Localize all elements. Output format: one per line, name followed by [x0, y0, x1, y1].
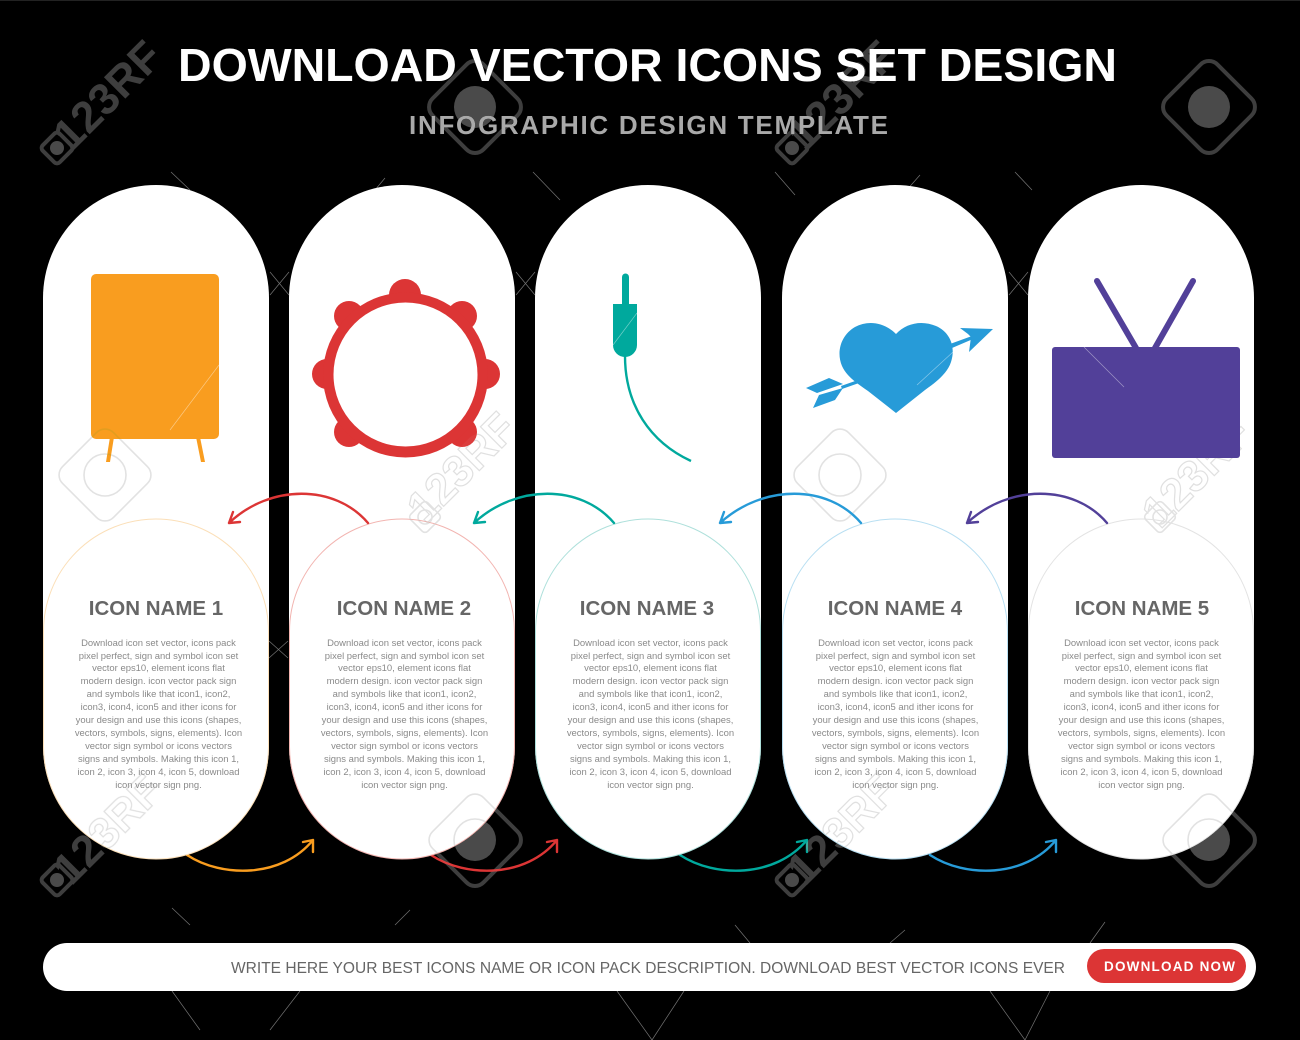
icon: red tambourine: [312, 279, 500, 458]
description 2: [321, 638, 488, 791]
description 2: Download icon set vector, icons pack: [327, 638, 482, 649]
subtitle: INFOGRAPHIC DESIGN TEMPLATE: [409, 110, 888, 140]
description 1: signs and symbols. Making this icon 1,: [78, 754, 239, 765]
text: 123RF: [778, 32, 906, 160]
description 2: your design and use this icons (shapes,: [322, 715, 487, 726]
text: 123RF: [1133, 409, 1261, 537]
description 5: modern design. icon vector pack sign: [1064, 676, 1219, 687]
footer bar: [43, 943, 1256, 991]
text: 123RF: [398, 404, 526, 532]
description 4: pixel perfect, sign and symbol icon set: [816, 651, 976, 662]
text oval 1: [44, 519, 268, 859]
description 1: icon 2, icon 3, icon 4, icon 5, download: [77, 767, 240, 778]
text oval 2: [290, 519, 514, 859]
description 1: Download icon set vector, icons pack: [81, 638, 236, 649]
description 5: [1058, 638, 1225, 791]
text: 123RF: [44, 766, 172, 894]
icon: orange easel board: [91, 274, 219, 462]
description 1: vector sign symbol or icons vectors: [85, 741, 232, 752]
description 2: icon3, icon4, icon5 and ither icons for: [327, 702, 482, 713]
description 1: and symbols like that icon1, icon2,: [87, 689, 230, 700]
description 5: and symbols like that icon1, icon2,: [1070, 689, 1213, 700]
description 1: vector eps10, element icons flat: [92, 663, 225, 674]
icon: purple tv with antenna: [1052, 281, 1240, 458]
description 5: Download icon set vector, icons pack: [1064, 638, 1219, 649]
description 4: Download icon set vector, icons pack: [818, 638, 973, 649]
description 5: icon vector sign png.: [1098, 780, 1185, 791]
description 4: your design and use this icons (shapes,: [813, 715, 978, 726]
description 3: vectors, symbols, signs, elements). Icon: [567, 728, 734, 739]
description 3: icon vector sign png.: [607, 780, 694, 791]
description 3: vector sign symbol or icons vectors: [577, 741, 724, 752]
icon: teal audio jack: [613, 274, 691, 461]
description 3: [567, 638, 734, 791]
description 4: vector sign symbol or icons vectors: [822, 741, 969, 752]
heading 2: ICON NAME 2: [337, 597, 471, 620]
description 1: [75, 638, 242, 791]
panel: icon name 1: [43, 185, 269, 859]
arrow: red connector panel 2 to 3: [431, 840, 557, 871]
description 2: modern design. icon vector pack sign: [327, 676, 482, 687]
description 3: pixel perfect, sign and symbol icon set: [571, 651, 731, 662]
arrow: red return panel 2 to 1: [229, 494, 368, 523]
heading 1: ICON NAME 1: [89, 597, 223, 620]
download button: DOWNLOAD NOW: [1104, 959, 1235, 974]
heading 3: ICON NAME 3: [580, 597, 714, 620]
arrow: blue connector panel 4 to 5: [930, 840, 1056, 871]
description 2: icon 2, icon 3, icon 4, icon 5, download: [323, 767, 486, 778]
text oval 5: [1028, 519, 1254, 859]
heading 4: ICON NAME 4: [828, 597, 963, 620]
description 2: and symbols like that icon1, icon2,: [333, 689, 476, 700]
arrow: teal connector panel 3 to 4: [680, 840, 807, 871]
description 4: and symbols like that icon1, icon2,: [824, 689, 967, 700]
description 1: vectors, symbols, signs, elements). Icon: [75, 728, 242, 739]
description 1: icon vector sign png.: [115, 780, 202, 791]
panel: icon name 3: [535, 185, 761, 859]
text: 123RF: [778, 766, 906, 894]
text: 123RF: [44, 32, 172, 160]
text: 123RF: [1133, 409, 1261, 537]
description 4: modern design. icon vector pack sign: [818, 676, 973, 687]
text: 123RF: [398, 404, 526, 532]
description 3: icon 2, icon 3, icon 4, icon 5, download: [569, 767, 732, 778]
description 3: vector eps10, element icons flat: [584, 663, 717, 674]
description 2: vector sign symbol or icons vectors: [331, 741, 478, 752]
icon: blue heart with arrow: [806, 323, 993, 413]
description 5: vector eps10, element icons flat: [1075, 663, 1208, 674]
description 2: vector eps10, element icons flat: [338, 663, 471, 674]
footer description: WRITE HERE YOUR BEST ICONS NAME OR ICON PACK DESCRIPTION. DOWNLOAD BEST VECTOR ICONS EVER: [231, 960, 1065, 977]
arrow: teal return panel 3 to 2: [474, 494, 614, 523]
description 1: modern design. icon vector pack sign: [81, 676, 236, 687]
description 4: [812, 638, 979, 791]
description 3: modern design. icon vector pack sign: [573, 676, 728, 687]
description 5: icon3, icon4, icon5 and ither icons for: [1064, 702, 1219, 713]
panel: icon name 5: [1028, 185, 1254, 859]
description 4: vector eps10, element icons flat: [829, 663, 962, 674]
description 5: vectors, symbols, signs, elements). Icon: [1058, 728, 1225, 739]
description 2: icon vector sign png.: [361, 780, 448, 791]
description 1: pixel perfect, sign and symbol icon set: [79, 651, 239, 662]
panel: icon name 2: [289, 185, 515, 859]
description 3: Download icon set vector, icons pack: [573, 638, 728, 649]
description 4: icon3, icon4, icon5 and ither icons for: [818, 702, 973, 713]
description 4: signs and symbols. Making this icon 1,: [815, 754, 976, 765]
description 4: icon vector sign png.: [852, 780, 939, 791]
title: DOWNLOAD VECTOR ICONS SET DESIGN: [178, 39, 1117, 91]
description 5: your design and use this icons (shapes,: [1059, 715, 1224, 726]
panel: icon name 4: [782, 185, 1008, 859]
description 2: signs and symbols. Making this icon 1,: [324, 754, 485, 765]
description 3: and symbols like that icon1, icon2,: [579, 689, 722, 700]
description 2: vectors, symbols, signs, elements). Icon: [321, 728, 488, 739]
download button: [1087, 949, 1246, 983]
text oval 3: [536, 519, 760, 859]
description 5: pixel perfect, sign and symbol icon set: [1062, 651, 1222, 662]
arrow: purple return panel 5 to 4: [967, 494, 1107, 523]
description 5: signs and symbols. Making this icon 1,: [1061, 754, 1222, 765]
heading 5: ICON NAME 5: [1075, 597, 1209, 620]
arrow: orange connector panel 1 to 2: [187, 840, 313, 871]
description 2: pixel perfect, sign and symbol icon set: [325, 651, 485, 662]
description 4: icon 2, icon 3, icon 4, icon 5, download: [814, 767, 977, 778]
description 4: vectors, symbols, signs, elements). Icon: [812, 728, 979, 739]
description 3: signs and symbols. Making this icon 1,: [570, 754, 731, 765]
description 3: icon3, icon4, icon5 and ither icons for: [573, 702, 728, 713]
text: 123RF: [778, 766, 906, 894]
description 1: icon3, icon4, icon5 and ither icons for: [81, 702, 236, 713]
text: 123RF: [44, 766, 172, 894]
description 3: your design and use this icons (shapes,: [568, 715, 733, 726]
text oval 4: [782, 519, 1008, 859]
description 1: your design and use this icons (shapes,: [76, 715, 241, 726]
arrow: blue return panel 4 to 3: [720, 494, 861, 523]
description 5: vector sign symbol or icons vectors: [1068, 741, 1215, 752]
description 5: icon 2, icon 3, icon 4, icon 5, download: [1060, 767, 1223, 778]
